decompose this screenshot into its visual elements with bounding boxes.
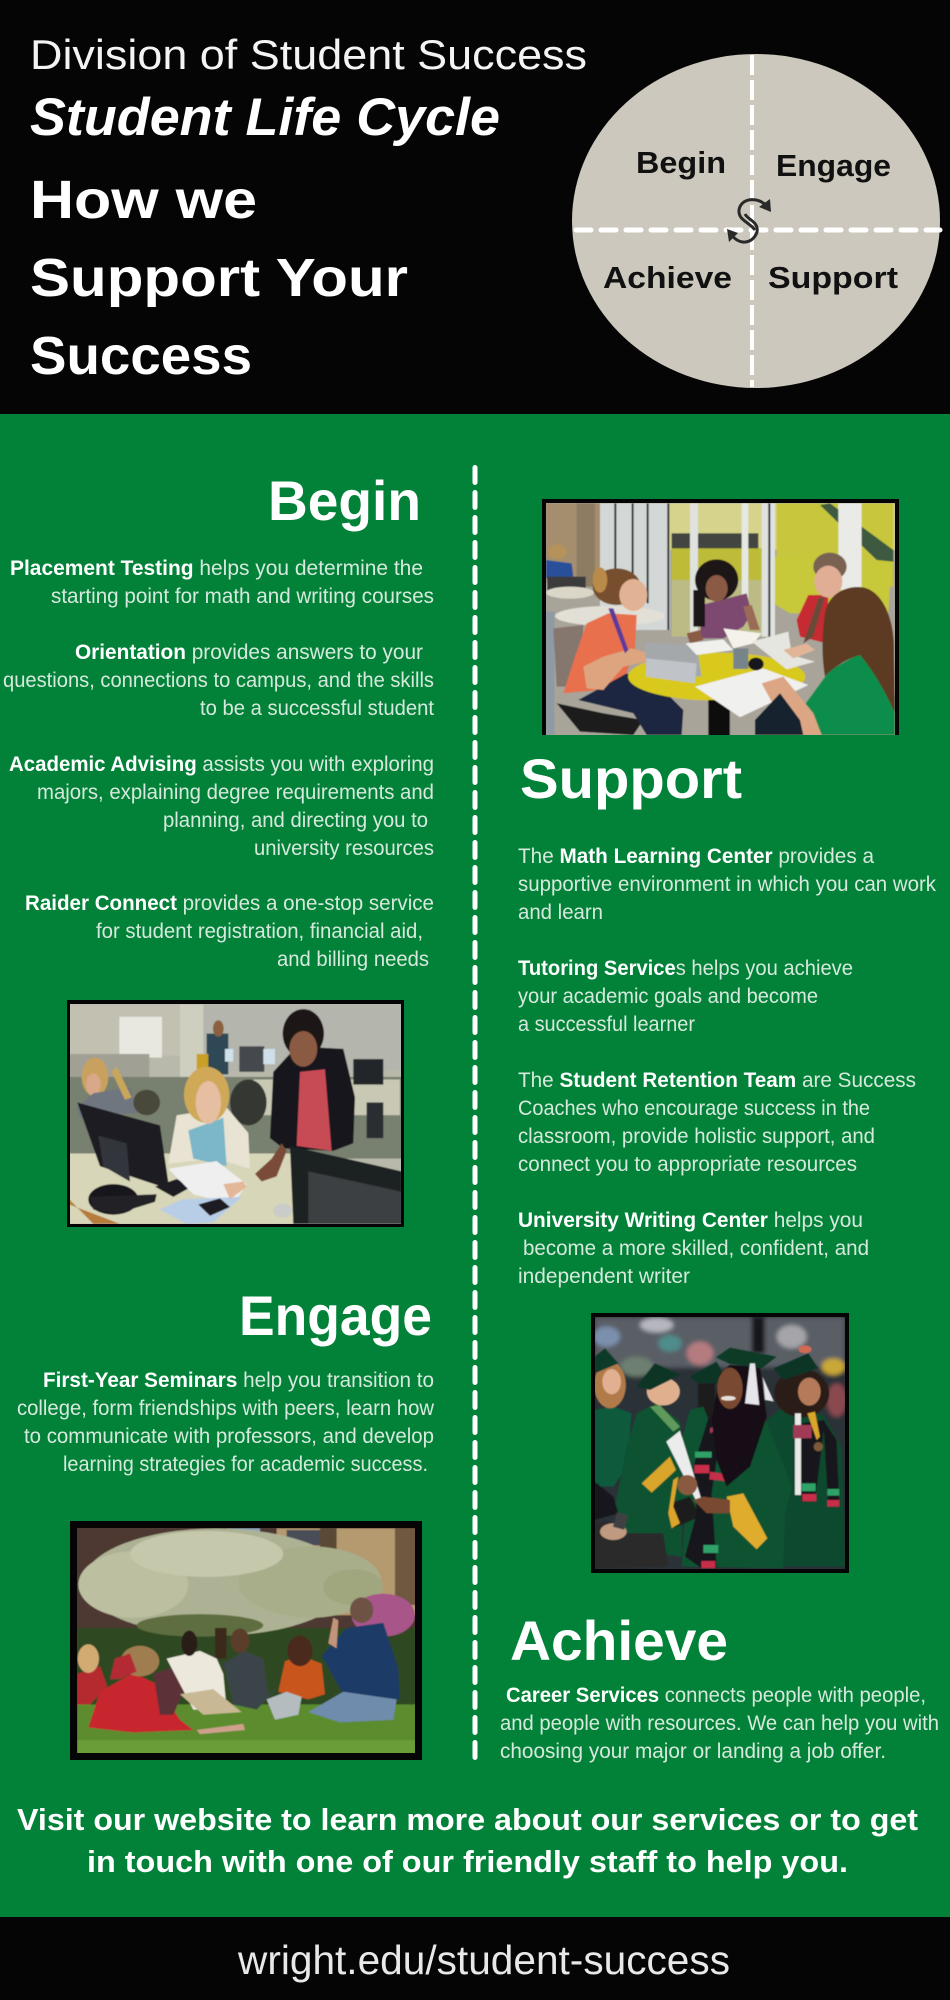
heading: Support: Support bbox=[520, 747, 742, 810]
header panel bbox=[0, 0, 950, 414]
green shirt woman bbox=[803, 653, 895, 735]
hands and diploma bbox=[666, 1431, 702, 1502]
header: main headline: How we bbox=[30, 170, 257, 230]
text: First-Year Seminars: to communicate with professors, and develop bbox=[24, 1424, 434, 1448]
shrubs bbox=[77, 1628, 416, 1710]
text: Placement Testing: Placement Testing helps you determine the bbox=[10, 556, 423, 580]
text: Math Learning Center: The Math Learning Center provides a bbox=[518, 844, 874, 868]
text: Orientation bbox=[3, 640, 434, 720]
diagram label: Achieve: Achieve bbox=[603, 260, 732, 295]
icon: cycle arrows bbox=[727, 199, 771, 242]
text: University Writing Center: become a more skilled, confident, and bbox=[523, 1236, 869, 1260]
coral woman bbox=[563, 613, 637, 693]
photo: graduates in green gowns bbox=[590, 1313, 850, 1573]
call to action text bbox=[17, 1802, 918, 1879]
diagram label: Engage: Engage bbox=[776, 148, 891, 183]
section: Achieve bbox=[500, 1609, 939, 1763]
cycle diagram bbox=[572, 54, 940, 388]
text: Tutoring Services: a successful learner bbox=[518, 1012, 695, 1036]
text: Raider Connect: Raider Connect provides a one-stop service bbox=[25, 891, 434, 915]
text: Math Learning Center: and learn bbox=[518, 900, 603, 924]
advisor bbox=[270, 1046, 355, 1151]
text: First-Year Seminars: learning strategies for academic success. bbox=[63, 1452, 428, 1476]
papers on desk bbox=[168, 1160, 247, 1199]
text: Student Retention Team: classroom, provide holistic support, and bbox=[518, 1124, 875, 1148]
photo: class seated outdoors under tree bbox=[70, 1521, 422, 1760]
text: Academic Advising: Academic Advising assists you with exploring bbox=[9, 752, 434, 776]
section: Begin bbox=[3, 469, 434, 971]
footer: website URL: wright.edu/student-success bbox=[237, 1937, 730, 1983]
right monitor bbox=[290, 1146, 402, 1224]
right grad bbox=[767, 1407, 845, 1567]
stole bbox=[684, 1418, 718, 1568]
text: Placement Testing: starting point for math and writing courses bbox=[51, 584, 434, 608]
header: student life cycle title: Student Life Cycle bbox=[30, 88, 500, 147]
left monitor bbox=[77, 1102, 169, 1189]
header: main headline: Support Your bbox=[30, 248, 408, 308]
text: Tutoring Services bbox=[518, 956, 853, 1036]
tree canopy bbox=[92, 1528, 316, 1636]
grass bbox=[77, 1704, 415, 1741]
left grad bbox=[595, 1407, 632, 1487]
text: Career Services bbox=[500, 1683, 939, 1763]
second grad bbox=[615, 1403, 683, 1557]
text: Math Learning Center bbox=[518, 844, 936, 924]
text: Academic Advising: planning, and directing you to bbox=[163, 808, 428, 832]
text: First-Year Seminars: First-Year Seminars help you transition to bbox=[43, 1368, 434, 1392]
text: Academic Advising bbox=[9, 752, 434, 860]
center student bbox=[133, 1090, 160, 1115]
heading: Achieve: Achieve bbox=[510, 1609, 728, 1672]
text: First-Year Seminars: college, form friendships with peers, learn how bbox=[17, 1396, 434, 1420]
text: Orientation: Orientation provides answers to your bbox=[75, 640, 423, 664]
photo: advisor helping student at computer bbox=[67, 1000, 404, 1230]
photo: study group at yellow table bbox=[542, 499, 899, 738]
red shirt woman bbox=[797, 595, 828, 643]
text: Raider Connect: and billing needs bbox=[277, 947, 429, 971]
text: Raider Connect bbox=[25, 891, 434, 971]
section: Engage bbox=[17, 1284, 434, 1476]
footer bar bbox=[0, 1917, 950, 2000]
students bbox=[77, 1666, 107, 1704]
call to action text: Visit our website to learn more about our services or to get bbox=[17, 1802, 918, 1837]
green background panel bbox=[0, 414, 950, 1917]
center dashed divider bbox=[472, 468, 478, 1760]
text: First-Year Seminars bbox=[17, 1368, 434, 1476]
text: Placement Testing bbox=[10, 556, 434, 608]
text: Student Retention Team: The Student Retention Team are Success bbox=[518, 1068, 916, 1092]
text: Math Learning Center: supportive environment in which you can work bbox=[518, 872, 936, 896]
audience lower left bbox=[595, 1482, 618, 1520]
main grad gown bbox=[681, 1421, 790, 1568]
text: Career Services: Career Services connects people with people, bbox=[506, 1683, 926, 1707]
background figure bbox=[546, 560, 573, 578]
text: Student Retention Team: Coaches who encourage success in the bbox=[518, 1096, 870, 1120]
text: University Writing Center: independent writer bbox=[518, 1264, 690, 1288]
diagram label: Support: Support bbox=[768, 260, 898, 295]
header: main headline: Success bbox=[30, 326, 252, 386]
text: Student Retention Team: connect you to appropriate resources bbox=[518, 1152, 857, 1176]
cap bbox=[716, 1348, 777, 1368]
left student bbox=[82, 1058, 108, 1096]
text: Student Retention Team bbox=[518, 1068, 916, 1176]
text: University Writing Center bbox=[518, 1208, 869, 1288]
header: main headline bbox=[30, 170, 408, 386]
purple woman bbox=[700, 593, 752, 638]
text: Orientation: to be a successful student bbox=[200, 696, 434, 720]
text: Academic Advising: university resources bbox=[254, 836, 434, 860]
rear grad bbox=[690, 1362, 727, 1388]
table bbox=[628, 653, 805, 701]
call to action text: in touch with one of our friendly staff to help you. bbox=[87, 1844, 848, 1879]
tablet bbox=[645, 643, 702, 677]
text: University Writing Center: University Writing Center helps you bbox=[518, 1208, 863, 1232]
crowd bbox=[590, 1313, 850, 1573]
heading: Begin: Begin bbox=[268, 469, 421, 532]
text: Orientation: questions, connections to campus, and the skills bbox=[3, 668, 434, 692]
hair bbox=[712, 1365, 767, 1487]
text: Tutoring Services: Tutoring Services helps you achieve bbox=[518, 956, 853, 980]
diagram label: Begin: Begin bbox=[636, 145, 726, 180]
section: Support bbox=[518, 747, 936, 1288]
heading: Engage: Engage bbox=[239, 1284, 432, 1347]
text: Career Services: choosing your major or landing a job offer. bbox=[500, 1739, 886, 1763]
text: Raider Connect: for student registration, financial aid, bbox=[96, 919, 423, 943]
face bbox=[717, 1368, 743, 1409]
header: division name: Division of Student Success bbox=[30, 31, 587, 78]
text: Academic Advising: majors, explaining degree requirements and bbox=[37, 780, 434, 804]
books bbox=[686, 639, 733, 655]
text: Tutoring Services: your academic goals and become bbox=[518, 984, 818, 1008]
